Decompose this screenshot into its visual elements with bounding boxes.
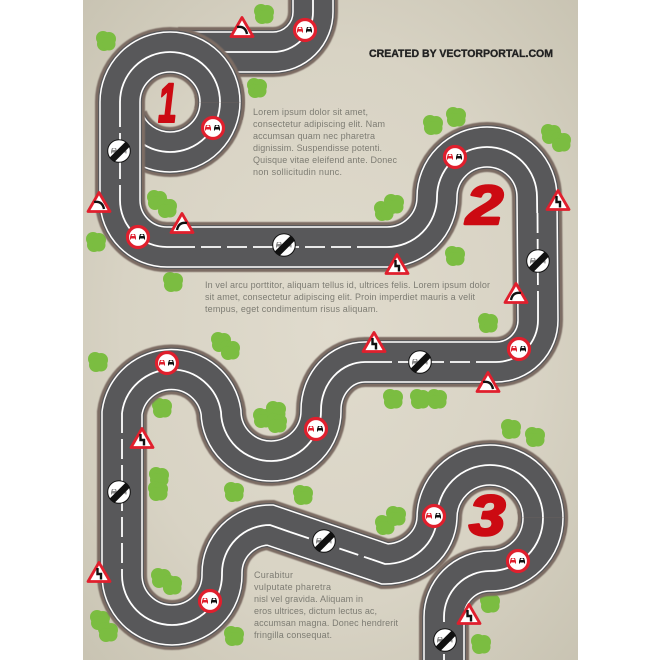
text block 1: accumsan quam nec pharetra	[253, 131, 375, 141]
road section: spiral tail	[123, 102, 220, 152]
text block 1: Quisque vitae eleifend ante. Donec	[253, 155, 398, 165]
text block 3: nisl vel gravida. Aliquam in	[254, 594, 363, 604]
number 2: 2	[465, 174, 503, 236]
text block 1: Lorem ipsum dolor sit amet,	[253, 107, 368, 117]
number 1: 1	[158, 71, 177, 134]
text block 3: fringilla consequat.	[254, 630, 332, 640]
text block 2: sit amet, consectetur adipiscing elit. Proin imperdiet mauris a velit	[205, 292, 475, 302]
text block 1: consectetur adipiscing elit. Nam	[253, 119, 385, 129]
text block 2: tempus, eget condimentum risus aliquam.	[205, 304, 378, 314]
text block 3	[254, 570, 398, 640]
text block 2	[205, 280, 490, 314]
text block 2: In vel arcu porttitor, aliquam tellus id, ultrices felis. Lorem ipsum dolor	[205, 280, 490, 290]
road signs	[88, 18, 569, 651]
road	[120, 0, 543, 660]
number 3: 3	[469, 484, 505, 548]
background panel	[83, 0, 578, 660]
trees	[86, 4, 571, 654]
road section: main route	[120, 52, 543, 625]
road section: top entry	[178, 0, 313, 52]
text block 1: non sollicitudin nunc.	[253, 167, 342, 177]
text block 3: Curabitur	[254, 570, 293, 580]
text block 1	[253, 107, 398, 177]
text block 3: accumsan magna. Donec hendrerit	[254, 618, 398, 628]
text block 3: vulputate pharetra	[254, 582, 331, 592]
road section: final bend	[444, 518, 543, 660]
heading: credit: CREATED BY VECTORPORTAL.COM	[369, 48, 553, 60]
text block 1: dignissim. Suspendisse potenti.	[253, 143, 382, 153]
text block 3: eros ultrices, dictum lectus ac,	[254, 606, 377, 616]
